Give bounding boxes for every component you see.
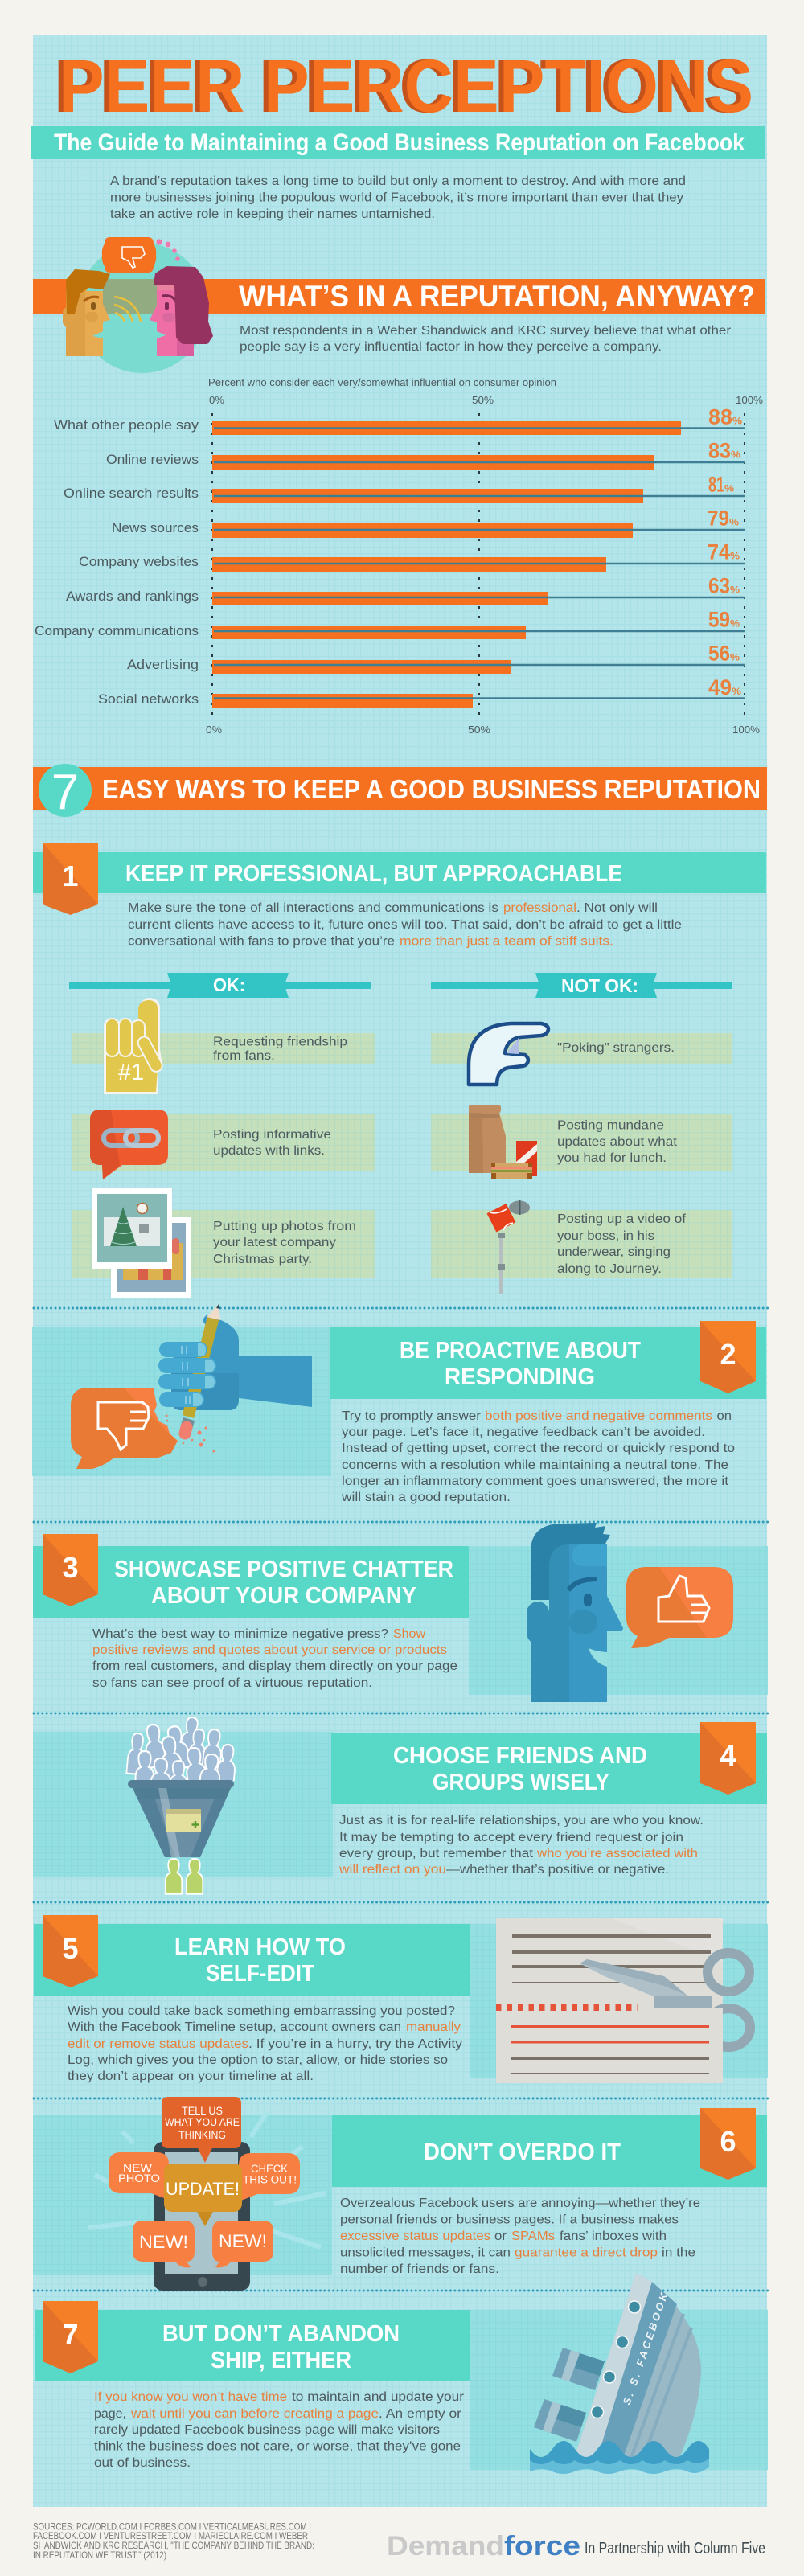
tip 7 text: page, — [94, 2407, 126, 2421]
bubble: check this out — [239, 2153, 300, 2201]
percent values: 74 — [708, 540, 730, 564]
bubble: tell us — [162, 2097, 241, 2163]
top axis labels — [209, 395, 763, 406]
percent values: % — [732, 686, 741, 697]
tip 7 heading — [35, 2301, 470, 2381]
top axis labels: 50% — [472, 395, 494, 406]
tip 3 text: positive reviews and quotes about your service or products — [92, 1643, 447, 1657]
bars — [212, 421, 681, 708]
tip 7 text: wait until you can before creating a page — [130, 2407, 379, 2421]
sources: IN REPUTATION WE TRUST." (2012) — [33, 2549, 166, 2561]
OK text rows: from fans. — [213, 1049, 275, 1063]
percent values: 49 — [708, 675, 732, 699]
tip 4 heading: CHOOSE FRIENDS AND — [393, 1743, 647, 1769]
percent values: % — [731, 449, 740, 461]
bubble: new right — [212, 2221, 273, 2267]
bubble: new right: NEW! — [219, 2231, 267, 2251]
logo: Demandforce — [387, 2531, 580, 2562]
tip 2 text: Instead of getting upset, correct the record or quickly respond to — [342, 1442, 735, 1455]
NOT OK text rows: Posting mundane — [557, 1119, 664, 1132]
category labels: Online search results — [64, 486, 199, 501]
tip 4 text: every group, but remember that — [339, 1847, 534, 1860]
NOT OK ribbon — [431, 973, 732, 998]
percent values: 79 — [708, 507, 729, 531]
logo: Demandforce: Demand — [387, 2531, 504, 2562]
OK text rows: Posting informative — [213, 1128, 331, 1142]
category labels: Company websites — [79, 554, 199, 569]
tip 3 heading — [33, 1534, 469, 1618]
top axis labels: 0% — [209, 395, 224, 406]
tip 2 heading: 2 — [720, 1338, 736, 1371]
bubble: update: UPDATE! — [166, 2179, 240, 2199]
category labels: Advertising — [127, 657, 199, 672]
text: survey summary — [240, 324, 731, 354]
percent values: 88 — [708, 405, 732, 429]
tip 6 heading: 6 — [720, 2125, 736, 2158]
tip 6 text — [340, 2197, 700, 2276]
tip 2 heading — [330, 1321, 766, 1399]
panel: tip 5 illustration backdrop — [470, 1924, 768, 2078]
panel: tip 2 illustration backdrop — [32, 1327, 331, 1476]
tip 7 text: rarely updated Facebook business page will make visitors — [94, 2423, 440, 2437]
percent values: % — [730, 550, 740, 561]
percent values: 63 — [708, 573, 730, 597]
tip 4 text — [338, 1814, 704, 1877]
tip 5 text: they don’t appear on your timeline at all. — [68, 2069, 314, 2083]
OK text rows: updates with links. — [213, 1144, 325, 1158]
tip 4 text: It may be tempting to accept every friend request or join — [339, 1831, 683, 1844]
tip 1 text: . Not only will — [576, 901, 658, 915]
text: survey summary: Most respondents in a Weber Shandwick and KRC survey believe that what other — [240, 324, 731, 338]
section band: what's in a reputation: WHAT’S IN A REPUTATION, ANYWAY? — [239, 280, 755, 313]
dotted gridlines — [212, 413, 745, 717]
icon: link speech bubble — [90, 1110, 168, 1179]
bubble: tell us: THINKING — [178, 2129, 226, 2141]
text: survey summary: people say is a very influential factor in how they perceive a company. — [240, 340, 662, 354]
tip 2 heading: BE PROACTIVE ABOUT — [400, 1338, 641, 1364]
bottom axis labels: 100% — [732, 724, 760, 736]
tip 6 text: number of friends or fans. — [340, 2262, 499, 2276]
tip 1 text: current clients have access to it, future ones will too. That said, don’t be afraid to get a little — [128, 918, 682, 932]
OK text rows: Putting up photos from — [213, 1220, 356, 1233]
tip 5 heading: LEARN HOW TO — [174, 1934, 346, 1960]
icon: foam finger: #1 — [118, 1060, 144, 1085]
bubble: tell us: WHAT YOU ARE — [165, 2116, 240, 2128]
tip 5 text: With the Facebook Timeline setup, account owners can — [68, 2020, 401, 2034]
dotted section dividers — [34, 1308, 768, 2291]
OK ribbon — [69, 973, 371, 998]
tip 5 text: manually — [406, 2020, 461, 2034]
category labels: Awards and rankings — [66, 589, 199, 604]
NOT OK ribbon: NOT OK: — [561, 975, 638, 996]
tip 7 heading: 7 — [62, 2318, 79, 2351]
tip 5 text — [68, 2004, 462, 2083]
NOT OK text rows: underwear, singing — [557, 1245, 671, 1259]
tip 7 text: out of business. — [94, 2456, 191, 2470]
tip 7 text: . An empty or — [379, 2407, 461, 2421]
tip 1 heading: 1 — [62, 859, 79, 892]
bubble: check this out: THIS OUT! — [243, 2174, 297, 2185]
tip 1 heading: KEEP IT PROFESSIONAL, BUT APPROACHABLE — [125, 861, 622, 887]
icon: microphone and underwear — [487, 1200, 530, 1294]
OK ribbon: OK: — [213, 974, 245, 995]
tip 3 heading: 3 — [62, 1551, 79, 1584]
category labels: News sources — [112, 520, 199, 535]
bottom axis labels — [206, 724, 760, 736]
icon: sinking ship — [530, 2273, 709, 2474]
tip 7 heading: SHIP, EITHER — [211, 2348, 351, 2373]
tip 1 heading — [33, 843, 766, 915]
tip 1 text: more than just a team of stiff suits. — [400, 934, 613, 949]
section band: 7 easy ways: 7 — [51, 765, 79, 820]
percent values: 56 — [708, 641, 730, 665]
category labels: What other people say — [54, 417, 199, 433]
tip 5 text: Log, which gives you the option to star, allow, or hide stories so — [68, 2053, 448, 2067]
section band: what's in a reputation — [33, 279, 765, 314]
tip 7 text: If you know you won’t have time — [94, 2390, 287, 2404]
NOT OK text rows: along to Journey. — [557, 1262, 662, 1276]
icon: smiling man with thumbs-up bubble — [527, 1523, 733, 1702]
icon: party photos — [92, 1188, 191, 1298]
bottom axis labels: 50% — [468, 724, 490, 736]
smokestack upper — [552, 2348, 605, 2390]
tip 1 text: professional — [503, 901, 576, 915]
tip 2 text: on — [717, 1409, 732, 1423]
OK text rows — [213, 1036, 356, 1266]
tip 6 text: guarantee a direct drop — [515, 2246, 658, 2259]
section band: 7 easy ways: EASY WAYS TO KEEP A GOOD BUSINESS REPUTATION — [102, 774, 761, 804]
icon: poking finger — [469, 1023, 548, 1085]
tip 3 text: so fans can see proof of a virtuous reputation. — [92, 1676, 372, 1690]
OK text rows: Requesting friendship — [213, 1036, 347, 1048]
tip 1 text: conversational with fans to prove that you’re — [128, 934, 395, 949]
icon: scissors cutting paper — [496, 1918, 750, 2083]
tip 7 text — [94, 2390, 464, 2470]
icon: crowd funnel — [126, 1717, 237, 1894]
intro text: more businesses joining the populous world of Facebook, it’s more important than ever that they — [110, 191, 683, 204]
bubble: tell us: TELL US — [182, 2105, 223, 2117]
top axis labels: 100% — [736, 395, 763, 406]
tip 2 text: will stain a good reputation. — [341, 1491, 511, 1504]
tip 6 text: excessive status updates — [340, 2229, 490, 2243]
icon: two people talking — [63, 237, 213, 373]
tip 4 heading — [331, 1722, 767, 1804]
smokestack lower — [534, 2399, 586, 2442]
tip 2 text: longer an inflammatory comment goes unanswered, the more it — [342, 1475, 729, 1488]
tip 5 heading: 5 — [62, 1932, 79, 1965]
bubble: new left — [133, 2221, 195, 2267]
percent values: 83 — [708, 439, 731, 463]
tip 2 text: your page. Let’s face it, negative feedback can’t be avoided. — [342, 1425, 705, 1439]
intro text: take an active role in keeping their names untarnished. — [110, 207, 435, 221]
tip 3 text: from real customers, and display them directly on your page — [92, 1659, 457, 1673]
bubble: new left: NEW! — [139, 2232, 188, 2252]
percent values: % — [732, 415, 742, 426]
tip 3 text: Show — [393, 1627, 426, 1641]
NOT OK text rows: you had for lunch. — [557, 1151, 667, 1165]
tip 7 text: think the business does not care, or worse, that they’ve gone — [94, 2439, 461, 2454]
icon: phone with notification bubbles — [88, 2097, 326, 2291]
tip 6 text: personal friends or business pages. If a business makes — [340, 2213, 679, 2227]
percent values: 59 — [708, 607, 730, 631]
category labels: Company communications — [35, 623, 199, 638]
tip 1 text: Make sure the tone of all interactions and communications is — [128, 901, 498, 915]
panel: tip 6 illustration backdrop — [33, 2115, 332, 2275]
tip 4 text: who you’re associated with — [536, 1847, 698, 1860]
tip 4 text: will reflect on you — [338, 1863, 446, 1877]
tip 3 text: What’s the best way to minimize negative press? — [92, 1627, 388, 1641]
tip 7 heading: BUT DON’T ABANDON — [162, 2321, 400, 2347]
tip 6 text: in the — [662, 2246, 695, 2259]
percent values: % — [730, 617, 740, 629]
tip 4 text: Just as it is for real-life relationships, you are who you know. — [339, 1814, 704, 1827]
category labels — [35, 417, 199, 707]
reference lines — [214, 428, 745, 698]
percent values: % — [730, 584, 740, 595]
tip 5 text: . If you’re in a hurry, try the Activity — [248, 2037, 462, 2051]
intro text — [110, 174, 686, 221]
sources: SOURCES: PCWORLD.COM I FORBES.COM I VERTICALMEASURES.COM I — [33, 2521, 311, 2533]
bubble: check this out: CHECK — [251, 2163, 288, 2175]
tip 3 heading: ABOUT YOUR COMPANY — [151, 1583, 416, 1609]
NOT OK text rows: Posting up a video of — [557, 1212, 687, 1226]
tip 4 text: —whether that’s positive or negative. — [446, 1863, 669, 1877]
category labels: Social networks — [98, 691, 199, 707]
NOT OK text rows: updates about what — [557, 1135, 678, 1149]
NOT OK text rows: your boss, in his — [557, 1229, 654, 1243]
tip 7 text: to maintain and update your — [292, 2390, 464, 2404]
tip 2 text: Try to promptly answer — [342, 1409, 481, 1423]
bubble: new photo: PHOTO — [118, 2172, 160, 2184]
OK text rows: your latest company — [213, 1236, 336, 1249]
section band: 7 easy ways — [33, 764, 767, 820]
green row boxes — [72, 1033, 732, 1278]
tip 3 heading: SHOWCASE POSITIVE CHATTER — [114, 1557, 453, 1582]
tip 5 text: Wish you could take back something embarrassing you posted? — [68, 2004, 455, 2018]
tip 6 text: SPAMs — [511, 2229, 555, 2243]
tip 4 heading: 4 — [720, 1739, 736, 1772]
bubble: new photo — [109, 2152, 169, 2198]
bottom axis labels: 0% — [206, 724, 222, 736]
percent values — [708, 405, 742, 699]
title: PEER PERCEPTIONS — [59, 44, 753, 128]
NOT OK text rows: "Poking" strangers. — [557, 1041, 675, 1055]
intro text: A brand’s reputation takes a long time to build but only a moment to destroy. And with more and — [110, 174, 686, 188]
tip 5 text: edit or remove status updates — [68, 2037, 248, 2051]
NOT OK text rows — [557, 1041, 687, 1276]
icon: foam finger — [104, 998, 164, 1094]
tip 4 heading: GROUPS WISELY — [433, 1770, 609, 1795]
logo: Demandforce: force — [504, 2531, 580, 2562]
tip 2 text: concerns with a resolution while maintaining a neutral tone. The — [342, 1458, 728, 1472]
tip 1 text — [128, 901, 682, 949]
bar chart: influence on consumer opinion — [35, 377, 763, 736]
panel: tip 3 illustration backdrop — [469, 1546, 768, 1695]
icon: sinking ship: S. S. FACEBOOK — [621, 2291, 671, 2406]
tip 6 text: unsolicited messages, it can — [340, 2246, 511, 2259]
tip 5 heading: SELF-EDIT — [206, 1961, 314, 1987]
tip 6 text: fans’ inboxes with — [560, 2229, 667, 2243]
sources: FACEBOOK.COM I VENTURESTREET.COM I MARIECLAIRE.COM I WEBER — [33, 2530, 308, 2541]
percent values: 81 — [708, 472, 724, 496]
bubble: new photo: NEW — [123, 2162, 152, 2174]
OK text rows: Christmas party. — [213, 1253, 312, 1266]
category labels: Online reviews — [106, 452, 199, 467]
sources: SHANDWICK AND KRC RESEARCH, "THE COMPANY BEHIND THE BRAND: — [33, 2540, 314, 2551]
tip 2 heading: RESPONDING — [445, 1364, 595, 1390]
icon: hand with pencil biting thumbs-down bubble — [71, 1304, 312, 1469]
tip 2 text — [341, 1409, 735, 1504]
panel: tip 4 illustration backdrop — [33, 1732, 333, 1877]
tip 5 heading — [34, 1915, 470, 1996]
tip 6 heading — [332, 2108, 767, 2187]
bubble: update — [164, 2164, 242, 2226]
tip 3 text — [92, 1627, 457, 1690]
percent values: % — [724, 482, 734, 494]
tip 6 heading: DON’T OVERDO IT — [424, 2139, 621, 2165]
tip 2 text: both positive and negative comments — [485, 1409, 712, 1423]
sources — [33, 2521, 314, 2561]
percent values: % — [730, 651, 740, 662]
tip 6 text: or — [494, 2229, 507, 2243]
chart caption: Percent who consider each very/somewhat influential on consumer opinion — [208, 377, 556, 388]
tip 6 text: Overzealous Facebook users are annoying—whether they’re — [340, 2197, 700, 2210]
icon: lunch bag — [469, 1105, 537, 1179]
panel: tip 7 illustration backdrop — [470, 2310, 768, 2470]
percent values: % — [729, 517, 739, 528]
